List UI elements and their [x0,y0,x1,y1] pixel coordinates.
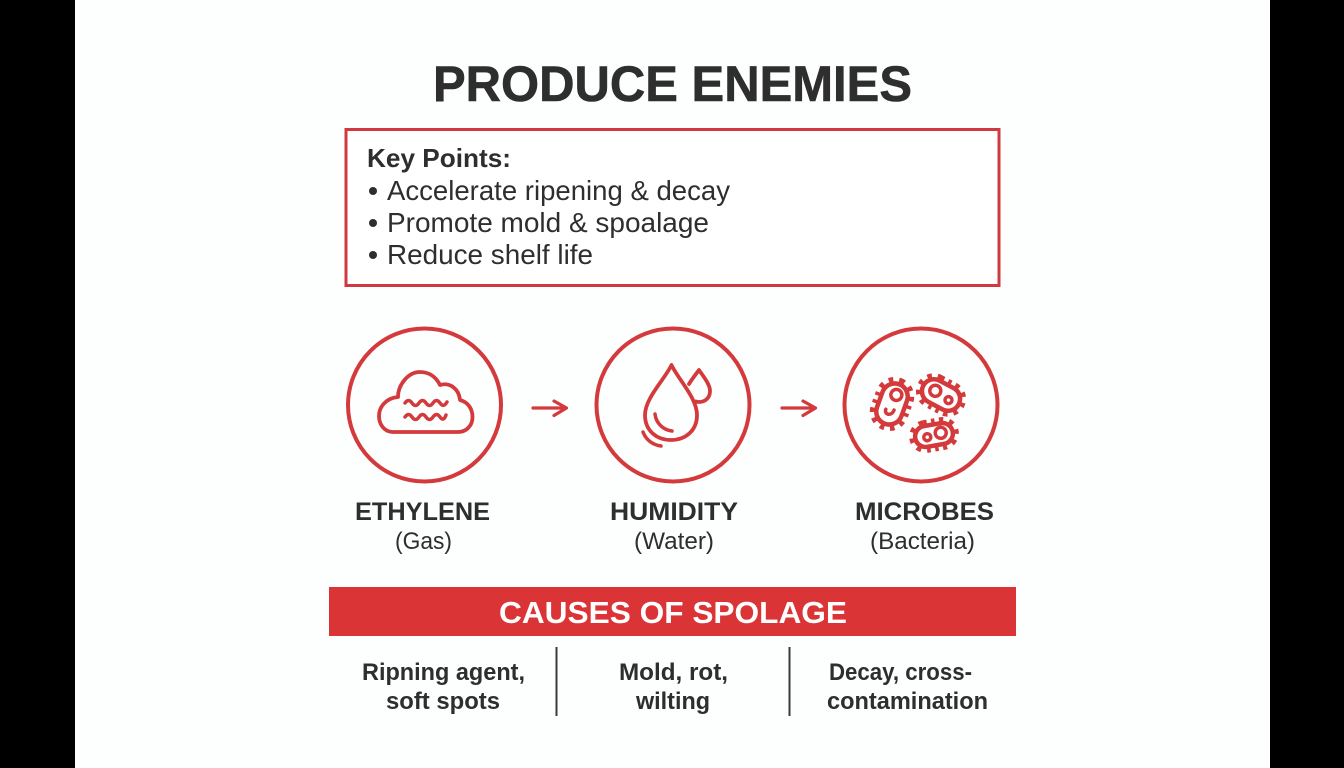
text: microbes effects: Decay, cross- [829,659,972,686]
banner: causes of spoilage [329,587,1016,636]
bacterium bottom [913,421,955,449]
bullet list: Reduce shelf life [387,239,593,270]
key points heading: Key Points: [367,143,511,173]
text: microbes effects: contamination [827,688,988,715]
label: microbes: MICROBES [855,498,994,526]
label: ethylene: ETHYLENE [355,498,490,526]
arrow: ethylene to humidity [533,401,566,416]
bacterium top right [918,375,964,415]
panel: key points [346,130,999,286]
text: humidity effects: wilting [635,688,710,715]
text: humidity effects: Mold, rot, [619,659,728,686]
label: humidity [610,498,738,555]
label: humidity: HUMIDITY [610,498,738,526]
label: humidity: (Water) [634,528,714,555]
text: microbes effects [827,659,988,715]
label: microbes [855,498,994,555]
text: humidity effects [619,659,728,715]
label: microbes: (Bacteria) [870,528,975,555]
bacterium left [873,380,911,428]
arrow: humidity to microbes [782,401,816,416]
icon: humidity water drops [596,328,750,482]
label: ethylene [355,498,490,555]
bullet list [369,175,730,270]
icon: ethylene gas cloud [348,328,501,482]
icon: microbes bacteria [844,328,998,482]
text: ethylene effects: Ripning agent, [362,659,525,686]
bullet list: Promote mold & spoalage [387,207,709,238]
text: ethylene effects: soft spots [386,688,500,715]
text: ethylene effects [362,659,525,715]
title: PRODUCE ENEMIES [433,56,912,112]
banner: causes of spoilage: CAUSES OF SPOLAGE [499,595,847,630]
bullet list: Accelerate ripening & decay [387,175,730,206]
label: ethylene: (Gas) [395,528,452,555]
